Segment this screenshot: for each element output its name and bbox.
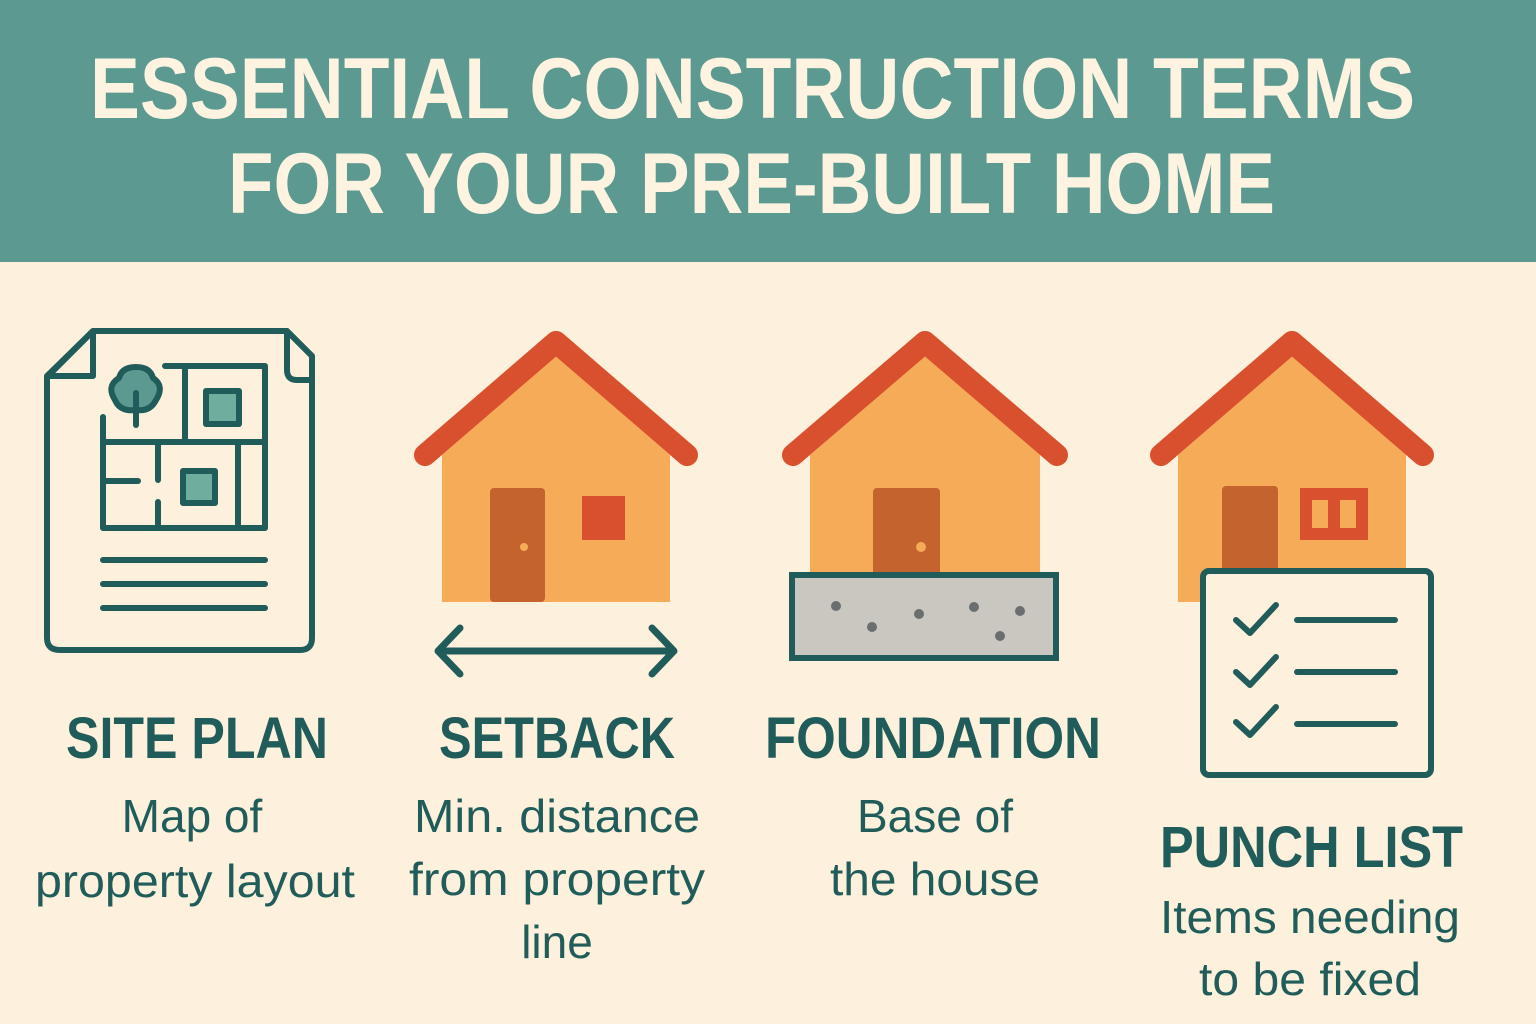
title [90,41,1415,232]
labels: PUNCH LIST [1160,815,1463,880]
descriptions: to be fixed [1199,953,1421,1005]
descriptions: the house [830,853,1040,905]
icon: site plan document [47,331,312,650]
arrow: setback distance [438,628,674,674]
labels [66,706,1463,880]
descriptions: property layout [35,855,355,907]
icon: checklist [1203,571,1431,775]
descriptions: Map of [122,790,263,842]
descriptions: Min. distance [414,790,700,842]
descriptions: line [521,916,593,968]
header band [0,0,1536,262]
descriptions [35,790,1460,1005]
labels: FOUNDATION [765,706,1101,771]
labels: SETBACK [439,706,675,771]
icon: house foundation [792,342,1057,658]
title: FOR YOUR PRE-BUILT HOME [228,136,1275,232]
icon: house setback [425,342,687,602]
labels: SITE PLAN [66,706,328,771]
descriptions: Items needing [1160,891,1460,943]
descriptions: from property [409,853,705,905]
descriptions: Base of [857,790,1013,842]
icon: house punch list [1161,342,1431,775]
